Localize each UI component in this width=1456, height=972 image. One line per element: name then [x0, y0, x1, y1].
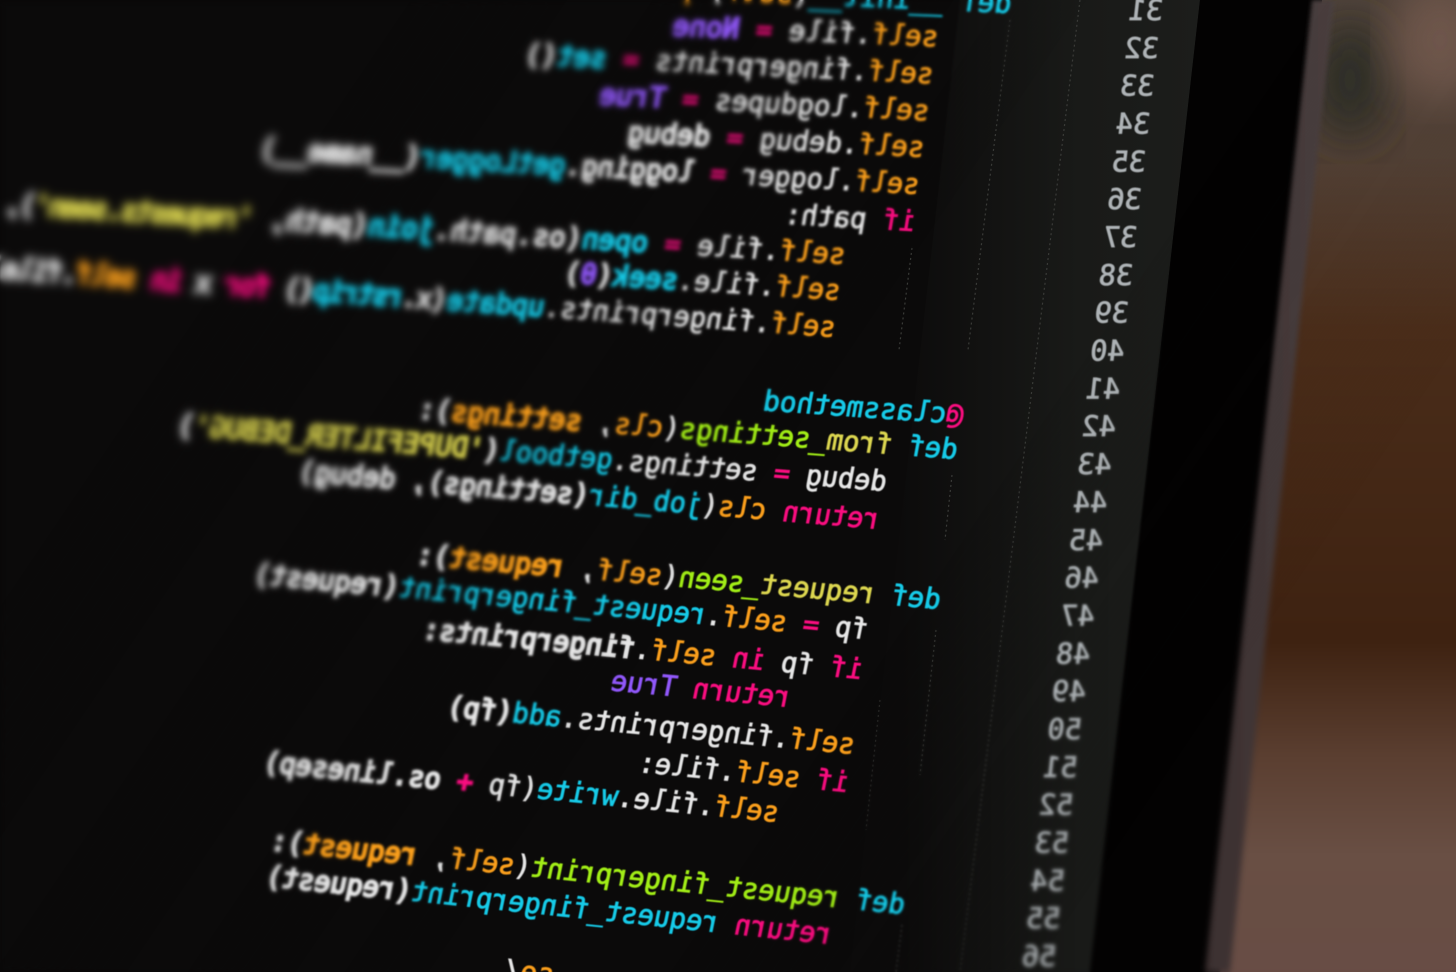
- line numbers: 41: [1084, 371, 1122, 405]
- mirrored source code: if fp in self.fingerprints:: [420, 612, 866, 686]
- background room behind laptop: [1150, 0, 1456, 972]
- mirrored source code: def request_fingerprint(self, request):: [268, 824, 908, 922]
- line numbers: 34: [1114, 107, 1152, 140]
- mirrored source code: fp = self.request_fingerprint(request): [251, 557, 871, 647]
- mirrored source code: self.logger = logging.getLogger(__name__): [257, 132, 922, 202]
- mirrored source code: return cls(job_dir(settings), debug): [295, 454, 883, 537]
- line numbers: 53: [1033, 826, 1071, 859]
- line numbers: 32: [1123, 31, 1161, 65]
- indent guides: [866, 0, 1080, 972]
- line numbers: 49: [1050, 674, 1088, 708]
- mirrored source code: self.debug = debug: [625, 116, 927, 164]
- line numbers: 35: [1110, 144, 1148, 178]
- line numbers: 55: [1024, 901, 1062, 935]
- mirrored source code: if path:: [782, 198, 918, 238]
- line numbers: 44: [1071, 485, 1109, 519]
- mirrored source code: def request_seen(self, request):: [414, 538, 944, 617]
- line numbers: 47: [1059, 598, 1097, 632]
- mirrored source code: self.fingerprints.update(x.rstrip() for x in self.file): [0, 251, 839, 344]
- mirrored source code: self.file = None: [670, 9, 941, 54]
- mirrored source code: self.logdupes = True: [597, 78, 932, 128]
- mirrored source code: return True: [608, 664, 794, 714]
- mirrored source code: self.file.write(fp + os.linesep): [261, 745, 782, 829]
- mirrored source code: def from_settings(cls, settings):: [416, 392, 961, 467]
- line numbers: 38: [1097, 258, 1135, 292]
- line numbers: 36: [1106, 182, 1144, 216]
- line numbers: 33: [1118, 69, 1156, 103]
- line numbers: 54: [1029, 863, 1067, 897]
- mirrored source code: @classmethod: [761, 384, 967, 431]
- mirrored source code: return request_fingerprint(request): [263, 859, 835, 952]
- line numbers: 51: [1041, 750, 1080, 784]
- line number gutter: [850, 0, 1200, 972]
- laptop bezel edge: [1205, 0, 1334, 972]
- mirrored source code: self.fingerprints = set(): [522, 37, 936, 91]
- line numbers: 46: [1063, 561, 1101, 595]
- line numbers: 39: [1093, 296, 1131, 330]
- line numbers: 45: [1067, 523, 1105, 557]
- line numbers: 56: [1020, 939, 1058, 972]
- black laptop bezel: [1090, 0, 1322, 972]
- line numbers: 37: [1101, 220, 1139, 254]
- line numbers: [1020, 0, 1165, 972]
- mirrored source code: [0, 0, 1014, 972]
- line numbers: 42: [1080, 409, 1118, 443]
- line numbers: 50: [1046, 712, 1084, 746]
- line numbers: 40: [1088, 334, 1127, 368]
- mirrored source code: self.fingerprints.add(fp): [444, 690, 858, 761]
- line numbers: 48: [1054, 636, 1092, 670]
- line numbers: 43: [1076, 447, 1114, 481]
- mirrored source code: debug = settings.getbool('DUPEFILTER_DEBUG'): [174, 408, 890, 499]
- mirrored source code: if self.file:: [636, 746, 852, 799]
- line numbers: 52: [1037, 788, 1075, 822]
- mirrored source code: self.file.seek(0): [562, 256, 844, 307]
